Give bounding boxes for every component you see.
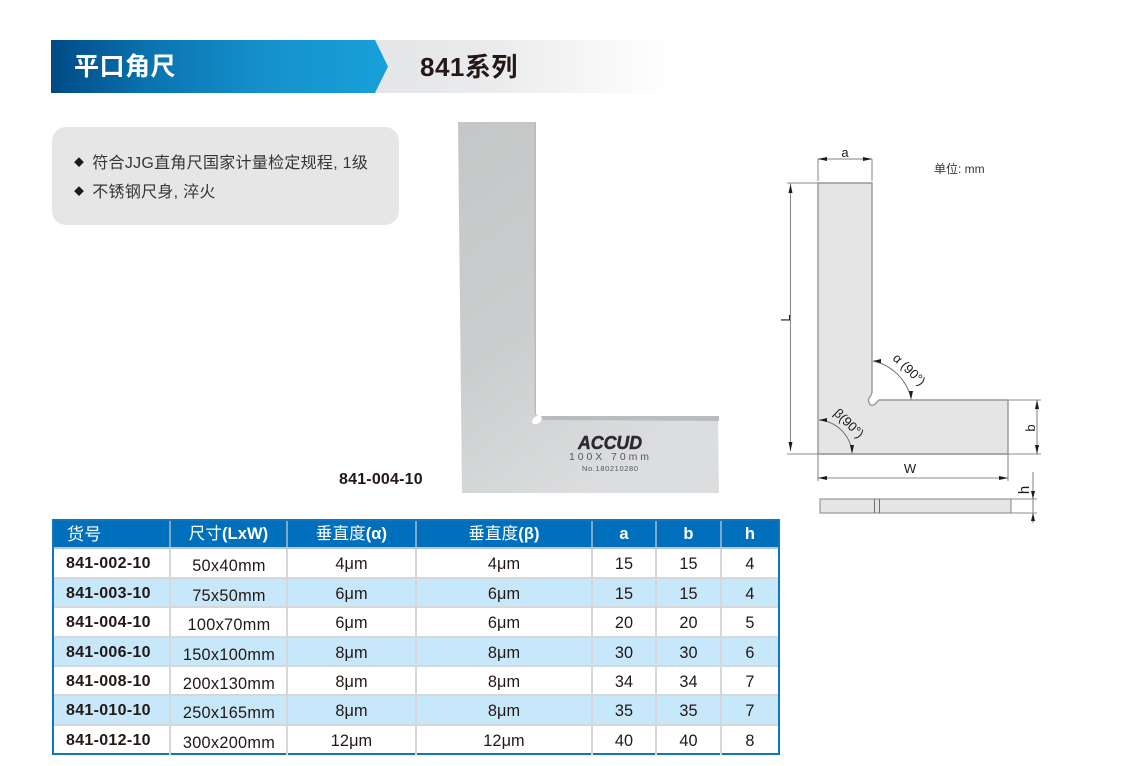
- table header: 货号: [67, 525, 102, 544]
- engraved serial number: No.180210280: [582, 464, 638, 473]
- row 841-008-10: 200x130mm: [183, 675, 275, 693]
- row 841-006-10: [54, 638, 778, 667]
- row 841-012-10: 40: [679, 732, 698, 750]
- row 841-008-10: 7: [745, 673, 755, 691]
- row 841-004-10: 20: [615, 614, 633, 632]
- table header: b: [683, 525, 694, 543]
- angle alpha: α (90°): [890, 350, 929, 389]
- row 841-003-10: 6μm: [488, 585, 520, 603]
- row 841-010-10: 8μm: [488, 702, 520, 720]
- row 841-006-10: 30: [679, 644, 698, 662]
- series heading: 841系列: [420, 52, 518, 82]
- row 841-008-10: 841-008-10: [66, 673, 151, 690]
- row 841-002-10: 4: [745, 555, 755, 573]
- feature 2: ◆ 不锈钢尺身, 淬火: [74, 184, 216, 201]
- table header: 尺寸(LxW): [189, 525, 268, 543]
- row 841-010-10: 7: [745, 702, 755, 720]
- row 841-010-10: 8μm: [335, 702, 368, 720]
- row 841-012-10: 12μm: [331, 732, 372, 750]
- banner blue arrow: [51, 40, 388, 93]
- row 841-008-10: 34: [679, 673, 698, 691]
- relief notch: [530, 414, 544, 426]
- row 841-010-10: [54, 696, 778, 726]
- engraved size: 100X 70mm: [569, 451, 649, 463]
- row 841-008-10: [54, 667, 778, 696]
- table header: 垂直度(α): [316, 525, 387, 543]
- table header: [54, 521, 778, 549]
- dimension h: h: [1016, 486, 1033, 494]
- row 841-003-10: 841-003-10: [66, 585, 151, 602]
- row 841-010-10: 250x165mm: [183, 704, 275, 722]
- dimension b: [1008, 400, 1041, 454]
- row 841-002-10: 15: [679, 555, 698, 573]
- row 841-003-10: 15: [679, 585, 698, 603]
- row 841-008-10: 34: [615, 673, 633, 691]
- row 841-002-10: 4μm: [488, 555, 520, 573]
- row 841-003-10: 6μm: [335, 585, 368, 603]
- row 841-004-10: [54, 608, 778, 638]
- row 841-010-10: 35: [615, 702, 633, 720]
- row 841-003-10: 75x50mm: [192, 587, 266, 605]
- dimension b: b: [1023, 424, 1038, 432]
- row 841-002-10: 4μm: [335, 555, 368, 573]
- row 841-012-10: 8: [745, 732, 755, 750]
- row 841-004-10: 6μm: [335, 614, 368, 632]
- table header: 垂直度(β): [468, 525, 540, 543]
- technical drawing: [778, 145, 1041, 523]
- drawing outline top view: [818, 183, 1008, 454]
- row 841-004-10: 6μm: [488, 614, 520, 632]
- row 841-002-10: 841-002-10: [66, 555, 151, 572]
- dimension W: W: [904, 461, 917, 476]
- row 841-003-10: [54, 579, 778, 608]
- row 841-010-10: 841-010-10: [66, 702, 151, 719]
- row 841-012-10: [66, 726, 755, 755]
- row 841-004-10: 841-004-10: [66, 614, 151, 631]
- row 841-004-10: 5: [745, 614, 755, 632]
- row 841-010-10: 35: [679, 702, 698, 720]
- dimension a: [818, 145, 872, 181]
- feature 1: ◆ 符合JJG直角尺国家计量检定规程, 1级: [74, 155, 368, 172]
- feature panel: [52, 127, 399, 225]
- banner grey fade strip: [371, 40, 671, 93]
- row 841-004-10: 20: [679, 614, 698, 632]
- row 841-012-10: 841-012-10: [66, 732, 151, 749]
- row 841-006-10: 150x100mm: [183, 646, 275, 664]
- row 841-012-10: 40: [615, 732, 633, 750]
- product photo: steel square: [458, 122, 719, 493]
- title: 平口角尺: [74, 53, 176, 81]
- angle alpha: [873, 350, 929, 400]
- row 841-003-10: 4: [745, 585, 755, 603]
- row 841-012-10: 12μm: [483, 732, 525, 750]
- header banner: [51, 40, 602, 93]
- row 841-006-10: 841-006-10: [66, 644, 151, 661]
- row 841-006-10: 6: [745, 644, 755, 662]
- angle beta: [819, 405, 867, 454]
- product model label: 841-004-10: [339, 471, 423, 488]
- dimension W: [818, 454, 1008, 481]
- dimension L: L: [778, 314, 793, 322]
- angle beta: β(90°): [831, 405, 867, 441]
- row 841-004-10: 100x70mm: [188, 616, 270, 634]
- engraved logo: ACCUD: [577, 433, 642, 453]
- dimension L: [778, 183, 1041, 454]
- row 841-002-10: [54, 549, 778, 579]
- ruler body: [458, 122, 719, 493]
- row 841-006-10: 8μm: [335, 644, 368, 662]
- row 841-003-10: 15: [615, 585, 633, 603]
- row 841-008-10: 8μm: [488, 673, 520, 691]
- table header: a: [619, 525, 629, 543]
- row 841-012-10: 300x200mm: [183, 734, 275, 752]
- row 841-008-10: 8μm: [335, 673, 368, 691]
- row 841-006-10: 30: [615, 644, 633, 662]
- dimension a: a: [841, 145, 849, 160]
- dimension h: [1011, 472, 1037, 523]
- specification table: [52, 519, 780, 755]
- row 841-002-10: 50x40mm: [192, 557, 266, 575]
- row 841-002-10: 15: [615, 555, 633, 573]
- side view: [820, 499, 1011, 513]
- row 841-006-10: 8μm: [488, 644, 520, 662]
- ruler bevel: [534, 122, 719, 421]
- unit note: 单位: mm: [934, 161, 985, 176]
- table header: h: [745, 525, 755, 543]
